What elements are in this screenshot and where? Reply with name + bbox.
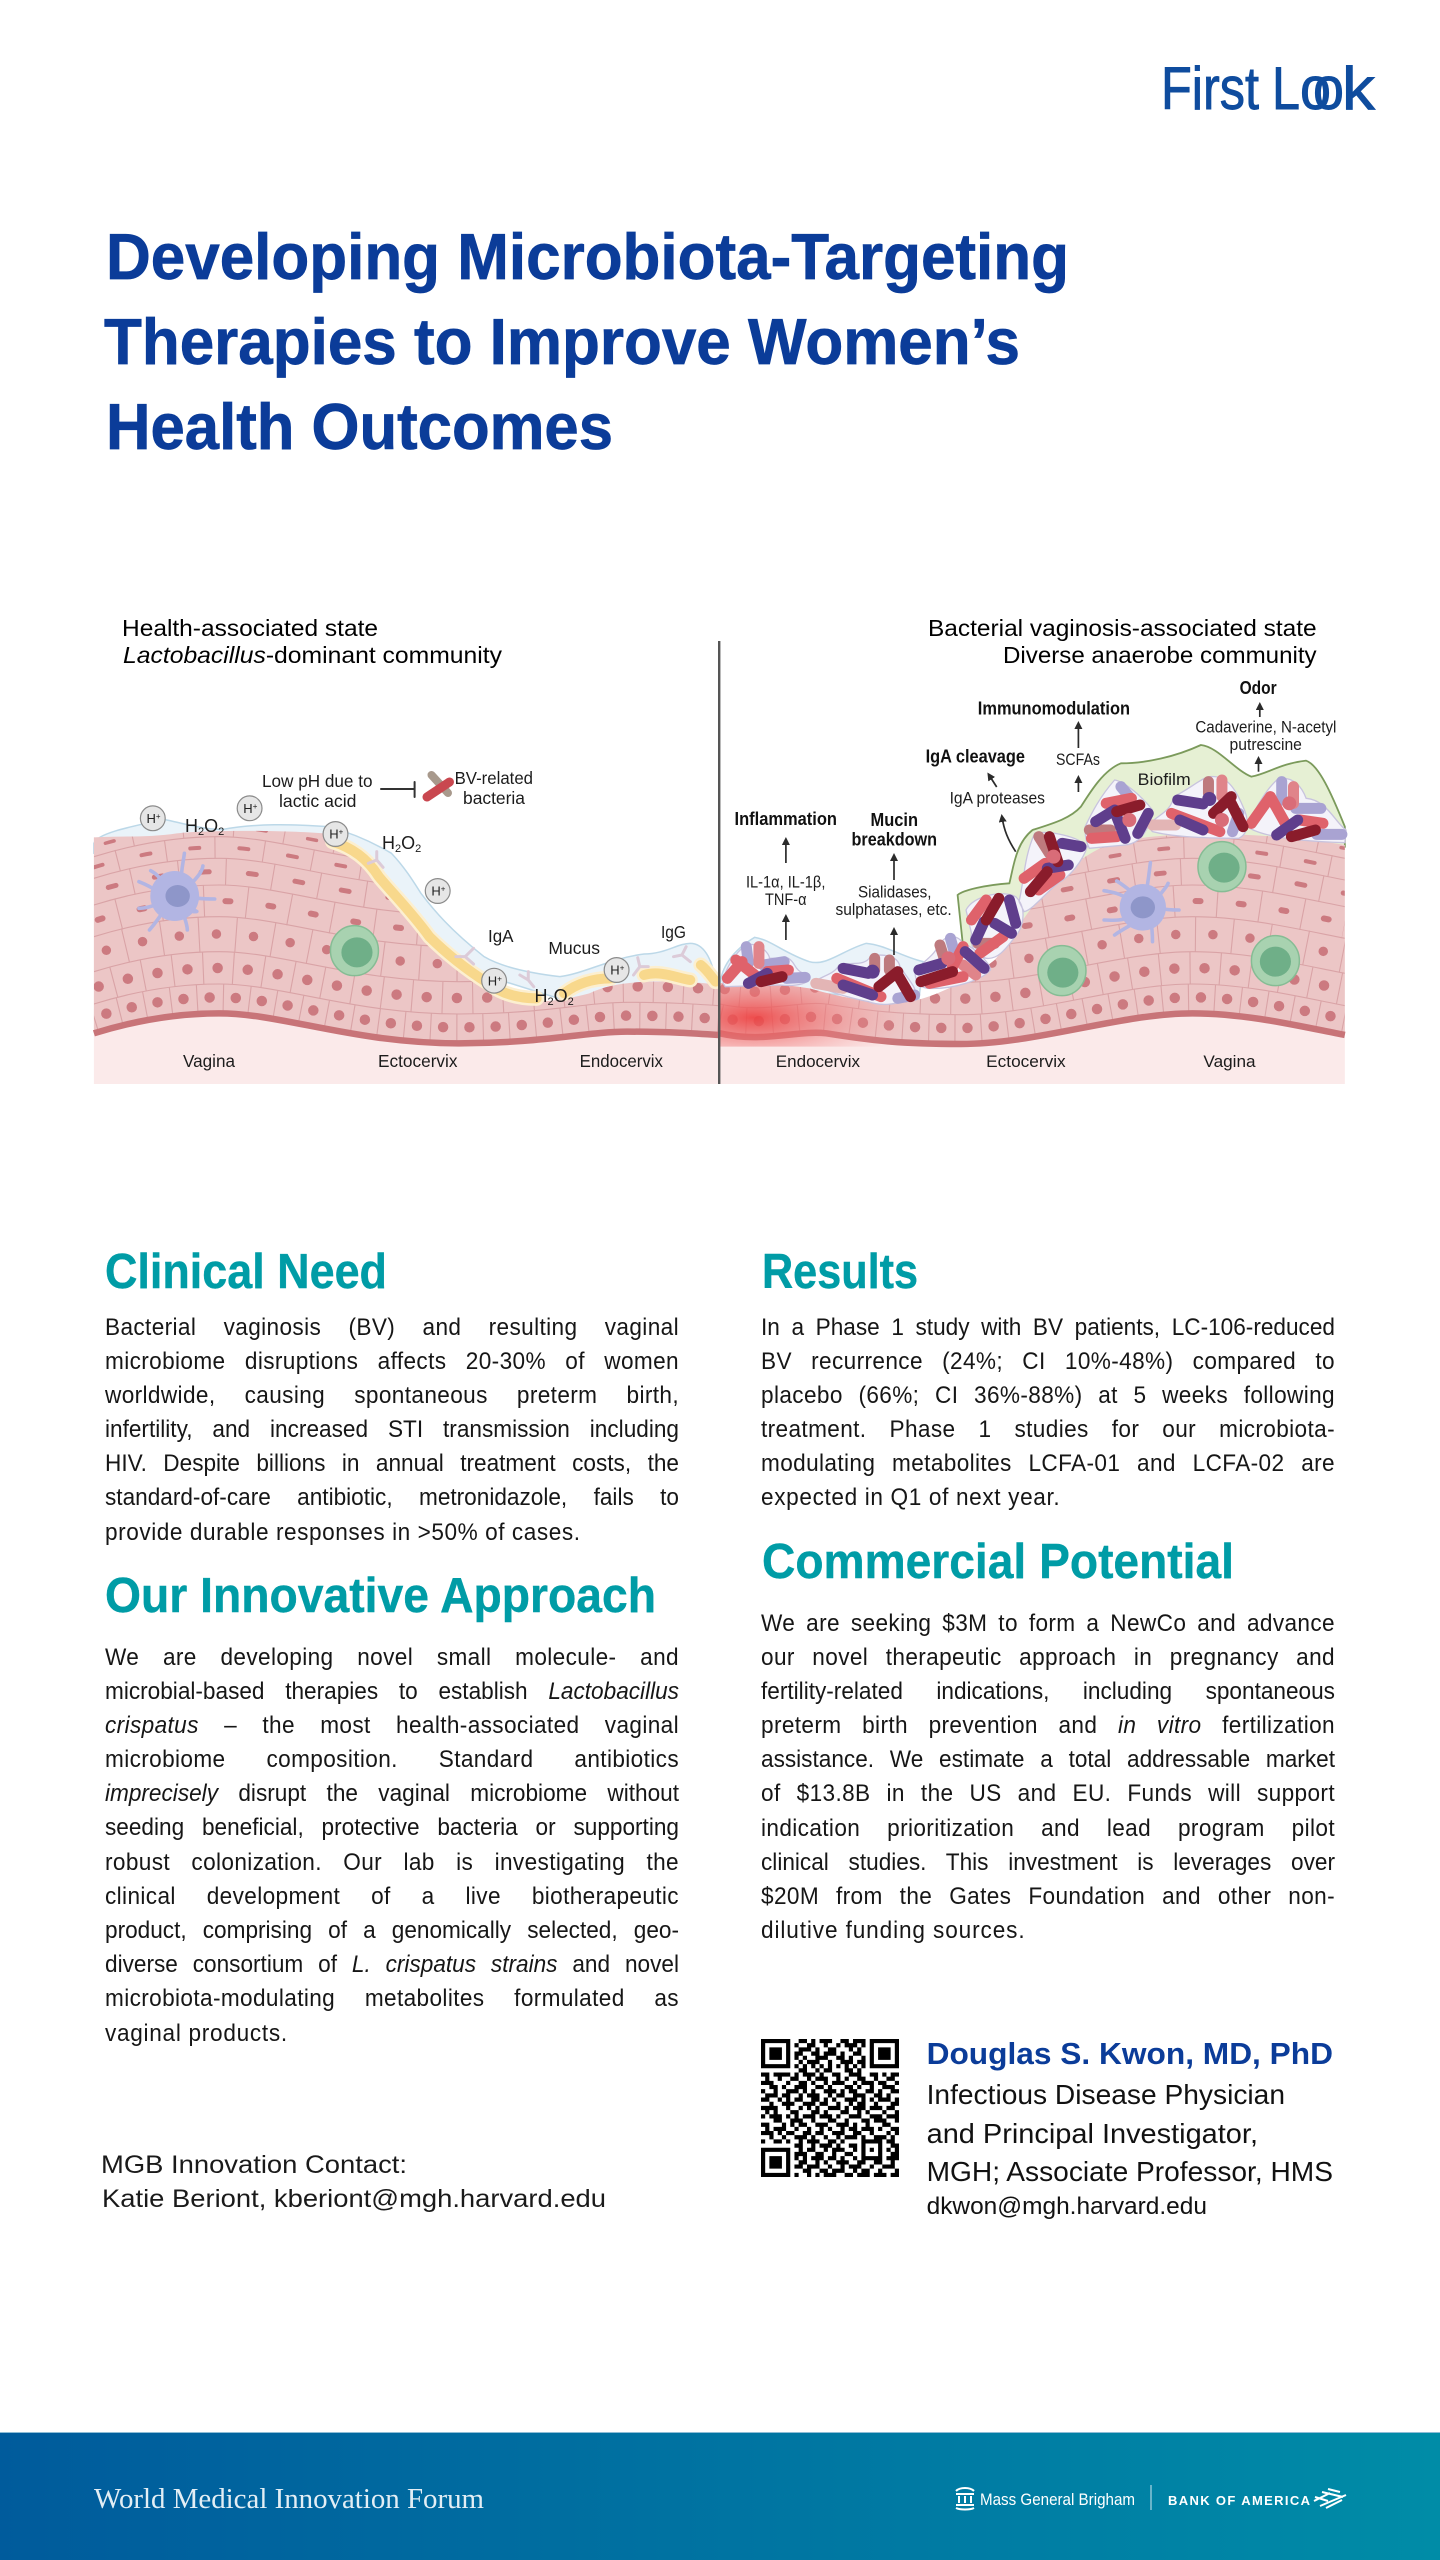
text: our innovative approach: microbiome composition. Standard antibiotics	[105, 1746, 679, 1773]
H2O2 labels: O	[204, 816, 218, 836]
right headings	[928, 615, 1317, 668]
H2O2 labels: 2	[548, 996, 554, 1008]
text: our innovative approach: diverse consortium of L. crispatus strains and novel	[105, 1951, 679, 1978]
logo: First Look: k	[1342, 55, 1376, 120]
biofilm	[958, 745, 1345, 953]
right regular labels: putrescine	[1230, 735, 1302, 754]
text: our innovative approach: microbiota-modulating metabolites formulated as	[105, 1985, 679, 2012]
text: our innovative approach: microbial-based therapies to establish Lactobacillus	[105, 1678, 679, 1705]
centre divider	[718, 641, 720, 1084]
right regular labels: Sialidases,	[858, 882, 932, 901]
H+ ions: H	[610, 963, 620, 978]
H+ ions: H	[431, 884, 441, 899]
H2O2 labels: H	[534, 986, 548, 1006]
right headings: Bacterial vaginosis-associated state	[928, 615, 1317, 641]
text: commercial potential: fertility-related indications, including spontaneous	[761, 1678, 1335, 1705]
text: commercial potential: assistance. We estimate a total addressable market	[761, 1746, 1335, 1773]
left labels: IgG	[661, 922, 686, 942]
right regular labels: Cadaverine, N-acetyl	[1195, 718, 1336, 737]
text: clinical need: infertility, and increased STI transmission including	[105, 1416, 679, 1443]
text: commercial potential: preterm birth prevention and in vitro fertilization	[761, 1712, 1335, 1739]
H+ ions: +	[497, 974, 502, 983]
H+ ions	[140, 796, 629, 993]
text: our innovative approach: crispatus – the most health-associated vaginal	[105, 1712, 679, 1739]
H2O2 labels: 2	[415, 843, 421, 855]
logo: First Look: o	[1313, 55, 1344, 120]
text: commercial potential	[761, 1610, 1335, 1944]
H+ ions: H	[146, 811, 156, 826]
left labels: BV-related	[455, 768, 533, 788]
presenter details	[927, 2036, 1333, 2220]
heading: commercial potential: Commercial Potential	[762, 1535, 1234, 1589]
H+ ions: +	[620, 964, 625, 973]
right bold effect labels: IgA cleavage	[926, 747, 1025, 767]
right bold effect labels	[734, 678, 1277, 850]
right regular labels: IL-1α, IL-1β,	[746, 872, 825, 891]
right regular labels: IgA proteases	[950, 788, 1045, 807]
innovation contact	[101, 2151, 606, 2213]
H2O2 labels: H	[185, 816, 198, 836]
right bold effect labels: Immunomodulation	[978, 698, 1130, 718]
presenter details: MGH; Associate Professor, HMS	[927, 2156, 1333, 2187]
left labels: Ectocervix	[378, 1051, 458, 1071]
left labels: lactic acid	[279, 791, 356, 811]
innovation contact: MGB Innovation Contact:	[101, 2151, 407, 2179]
presenter name: Douglas S. Kwon, MD, PhD	[927, 2036, 1333, 2071]
figure: health-associated vs bacterial vaginosis-associated state	[93, 615, 1348, 1084]
right regular labels: sulphatases, etc.	[836, 900, 952, 919]
innovation contact: Katie Beriont, kberiont@mgh.harvard.edu	[102, 2185, 606, 2213]
text: results: treatment. Phase 1 studies for our microbiota-	[761, 1416, 1335, 1443]
bacterial clusters	[723, 777, 1346, 1004]
left labels: Endocervix	[580, 1051, 663, 1071]
text: results: In a Phase 1 study with BV patients, LC-106-reduced	[761, 1314, 1335, 1340]
text: results: modulating metabolites LCFA-01 and LCFA-02 are	[761, 1450, 1335, 1477]
logo: First Look: First	[1161, 55, 1259, 120]
text: results: placebo (66%; CI 36%-88%) at 5 weeks following	[761, 1382, 1335, 1409]
text: commercial potential: indication prioritization and lead program pilot	[761, 1815, 1335, 1842]
right panel: BV-associated tissue	[720, 745, 1346, 1084]
text: commercial potential: $20M from the Gates Foundation and other non-	[761, 1883, 1335, 1910]
dendritic cell	[139, 853, 215, 930]
text: our innovative approach: vaginal products.	[105, 2020, 288, 2047]
text: commercial potential: our novel therapeutic approach in pregnancy and	[761, 1644, 1335, 1671]
right regular labels: SCFAs	[1056, 750, 1100, 769]
right bold effect labels: breakdown	[852, 830, 937, 850]
left labels: Low pH due to	[262, 771, 372, 791]
footer: sponsor logos: BANK OF AMERICA	[1168, 2493, 1311, 2508]
right headings: Diverse anaerobe community	[1003, 642, 1317, 668]
text: clinical need: standard-of-care antibiotic, metronidazole, fails to	[105, 1484, 679, 1511]
left headings: Lactobacillus -dominant community	[123, 642, 503, 668]
immune cell	[330, 926, 378, 976]
H+ ions: +	[441, 885, 446, 894]
right regular labels: TNF-α	[765, 890, 807, 909]
text: clinical need	[105, 1314, 679, 1546]
panel: clinical need	[105, 1250, 679, 1546]
H2O2 labels: H	[382, 833, 395, 853]
right regular labels	[746, 718, 1336, 1071]
text: clinical need: provide durable responses in >50% of cases.	[105, 1519, 581, 1546]
left labels: bacteria	[463, 788, 525, 808]
presenter details: dkwon@mgh.harvard.edu	[927, 2193, 1207, 2220]
right regular labels: Vagina	[1203, 1052, 1256, 1071]
panel: results	[761, 1250, 1335, 1511]
left headings	[122, 615, 503, 668]
inflammation glow	[720, 982, 906, 1047]
text: clinical need: microbiome disruptions affects 20-30% of women	[105, 1348, 679, 1375]
text: results: BV recurrence (24%; CI 10%-48%) compared to	[761, 1348, 1335, 1375]
H2O2 labels: O	[401, 833, 415, 853]
text: commercial potential: of $13.8B in the US and EU. Funds will support	[761, 1780, 1335, 1807]
H+ ions: H	[329, 827, 339, 842]
left labels: Mucus	[548, 938, 600, 958]
H2O2 labels: 2	[568, 996, 574, 1008]
H+ ions: H	[243, 801, 253, 816]
H2O2 labels: 2	[218, 826, 224, 838]
presenter details: Infectious Disease Physician	[927, 2079, 1285, 2110]
right regular labels: Biofilm	[1138, 770, 1191, 789]
left headings: Health-associated state	[122, 615, 378, 641]
footer: sponsor logos: Mass General Brigham	[980, 2490, 1135, 2509]
text: clinical need: Bacterial vaginosis (BV) and resulting vaginal	[105, 1314, 679, 1340]
H+ ions: H	[488, 973, 497, 988]
right bold effect labels: Mucin	[870, 810, 918, 830]
panel: commercial potential	[761, 1535, 1335, 1944]
footer: sponsor logos	[955, 2485, 1346, 2510]
H2O2 labels: O	[554, 986, 568, 1006]
logo: First Look: L	[1272, 55, 1300, 120]
antibodies	[368, 852, 690, 987]
text: clinical need: worldwide, causing spontaneous preterm birth,	[105, 1382, 679, 1409]
text: our innovative approach: We are developing novel small molecule- and	[105, 1644, 679, 1670]
H+ ions: +	[339, 828, 344, 837]
right regular labels: Endocervix	[776, 1052, 860, 1071]
title: Therapies to Improve Women’s	[104, 305, 1020, 378]
text: results	[761, 1314, 1335, 1511]
text: our innovative approach	[105, 1644, 679, 2047]
QR code	[761, 2039, 899, 2177]
text: clinical need: HIV. Despite billions in annual treatment costs, the	[105, 1450, 679, 1477]
footer: forum name: World Medical Innovation Forum	[94, 2483, 484, 2515]
title	[104, 225, 1069, 463]
text: our innovative approach: robust colonization. Our lab is investigating the	[105, 1849, 679, 1876]
text: our innovative approach: seeding beneficial, protective bacteria or supporting	[105, 1814, 679, 1841]
logo: First Look: o	[1300, 55, 1331, 120]
text: results: expected in Q1 of next year.	[761, 1484, 1060, 1511]
right regular labels: Ectocervix	[986, 1052, 1066, 1071]
text: commercial potential: We are seeking $3M to form a NewCo and advance	[761, 1610, 1335, 1636]
logo: First Look	[1161, 55, 1376, 120]
title: Health Outcomes	[106, 390, 613, 463]
left panel: health-associated tissue	[94, 817, 719, 1084]
H+ ions: +	[253, 802, 258, 811]
lactobacilli band	[333, 842, 716, 998]
H2O2 labels: 2	[395, 843, 401, 855]
dendritic cell	[1104, 863, 1179, 942]
arrows	[786, 705, 1260, 955]
footer band	[0, 2432, 1440, 2560]
heading: our innovative approach: Our Innovative Approach	[105, 1570, 656, 1623]
right bold effect labels: Odor	[1240, 678, 1277, 698]
immune cells	[1038, 842, 1299, 996]
text: our innovative approach: clinical development of a live biotherapeutic	[105, 1883, 679, 1910]
H+ ions: +	[156, 812, 161, 821]
text: commercial potential: dilutive funding sources.	[761, 1917, 1026, 1944]
H2O2 labels: 2	[198, 826, 204, 838]
panel: our innovative approach	[105, 1570, 679, 2047]
inhibition arrow and BV-related bacteria icon	[381, 775, 450, 797]
left labels	[183, 768, 686, 1071]
presenter details: and Principal Investigator,	[927, 2118, 1258, 2149]
text: our innovative approach: imprecisely disrupt the vaginal microbiome without	[105, 1780, 679, 1807]
left labels: IgA	[488, 926, 514, 946]
text: our innovative approach: product, comprising of a genomically selected, geo-	[105, 1917, 679, 1944]
H2O2 labels	[185, 816, 574, 1008]
text: commercial potential: clinical studies. This investment is leverages over	[761, 1849, 1335, 1876]
right bold effect labels: Inflammation	[734, 809, 837, 829]
left labels: Vagina	[183, 1051, 235, 1071]
